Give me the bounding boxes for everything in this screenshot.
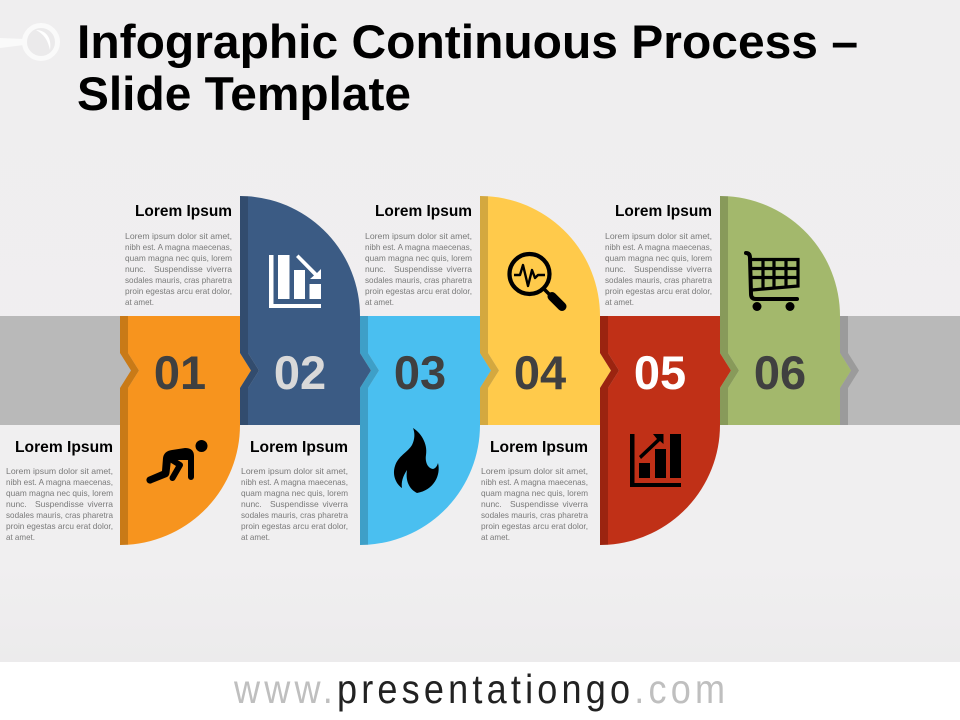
step 03 sky blue: 03	[394, 346, 446, 399]
text block: step 01: viverra	[88, 499, 113, 509]
icon: rising bar chart	[630, 434, 681, 487]
text block: step 04: Suspendisse	[394, 264, 443, 274]
text block: step 02: nibh est. A magna maecenas,	[125, 242, 232, 252]
text block: step 05: at amet.	[481, 532, 510, 542]
step 01 orange: 01	[154, 346, 206, 399]
step 02 navy	[240, 196, 371, 425]
text block: step 06: nunc.	[605, 264, 626, 274]
step 05 red: 05	[634, 346, 686, 399]
text block: step 02: Suspendisse	[154, 264, 203, 274]
text block: step 05: proin egestas arcu erat dolor,	[481, 521, 588, 531]
text block: step 02: quam magna nec quis, lorem	[125, 253, 232, 263]
text block: step 06: Lorem Ipsum	[615, 203, 712, 220]
text block: step 02: viverra	[206, 264, 232, 274]
text block: step 03: nunc.	[241, 499, 262, 509]
text block: step 03: nibh est. A magna maecenas,	[241, 477, 348, 487]
text block: step 01: nunc.	[6, 499, 27, 509]
text block: step 02: Lorem ipsum dolor sit amet,	[125, 231, 232, 241]
text block: step 05	[481, 439, 588, 542]
text block: step 06: Suspendisse	[634, 264, 683, 274]
text block: step 01: Suspendisse	[35, 499, 84, 509]
text block: step 04: proin egestas arcu erat dolor,	[365, 286, 472, 296]
title: Slide Template	[77, 67, 411, 120]
text block: step 03: proin egestas arcu erat dolor,	[241, 521, 348, 531]
text block: step 04: quam magna nec quis, lorem	[365, 253, 472, 263]
text block: step 02: sodales mauris, cras pharetra	[125, 275, 232, 285]
text block: step 05: sodales mauris, cras pharetra	[481, 510, 588, 520]
text block: step 05: nibh est. A magna maecenas,	[481, 477, 588, 487]
step 02 navy: 02	[274, 346, 326, 399]
text block: step 03: Lorem ipsum dolor sit amet,	[241, 466, 348, 476]
icon: magnifier with pulse	[510, 254, 562, 306]
footer website text: www.presentationgo.com	[233, 667, 725, 713]
text block: step 06: viverra	[686, 264, 712, 274]
footer bar	[0, 662, 960, 720]
text block: step 04: viverra	[446, 264, 472, 274]
step 04 yellow	[480, 196, 611, 425]
icon: falling bar chart	[269, 254, 321, 308]
text block: step 02: nunc.	[125, 264, 146, 274]
text block: step 04: nibh est. A magna maecenas,	[365, 242, 472, 252]
text block: step 04	[365, 203, 472, 307]
text block: step 01: sodales mauris, cras pharetra	[6, 510, 113, 520]
text block: step 03	[241, 439, 348, 542]
step 06 green	[720, 196, 851, 425]
icon: shopping cart	[746, 253, 798, 311]
text block: step 06: sodales mauris, cras pharetra	[605, 275, 712, 285]
icon: runner at start	[146, 440, 208, 484]
text block: step 04: at amet.	[365, 297, 394, 307]
text block: step 03: Lorem Ipsum	[250, 439, 348, 456]
title: Infographic Continuous Process –	[77, 15, 858, 68]
text block: step 01: nibh est. A magna maecenas,	[6, 477, 113, 487]
text block: step 01: Lorem ipsum dolor sit amet,	[6, 466, 113, 476]
text block: step 01: quam magna nec quis, lorem	[6, 488, 113, 498]
step 05 red	[600, 316, 731, 545]
text block: step 01: Lorem Ipsum	[15, 439, 113, 456]
text block: step 06	[605, 203, 712, 307]
text block: step 03: viverra	[322, 499, 348, 509]
grey process band	[0, 316, 960, 425]
text block: step 05: viverra	[562, 499, 588, 509]
text block: step 04: sodales mauris, cras pharetra	[365, 275, 472, 285]
text block: step 02: proin egestas arcu erat dolor,	[125, 286, 232, 296]
text block: step 03: quam magna nec quis, lorem	[241, 488, 348, 498]
text block: step 03: at amet.	[241, 532, 270, 542]
text block: step 01: at amet.	[6, 532, 35, 542]
text block: step 02	[125, 203, 232, 307]
text block: step 06: quam magna nec quis, lorem	[605, 253, 712, 263]
text block: step 01	[6, 439, 113, 542]
icon: flame	[394, 428, 439, 493]
text block: step 06: at amet.	[605, 297, 634, 307]
text block: step 05: nunc.	[481, 499, 502, 509]
text block: step 04: nunc.	[365, 264, 386, 274]
text block: step 06: Lorem ipsum dolor sit amet,	[605, 231, 712, 241]
text block: step 03: Suspendisse	[270, 499, 319, 509]
text block: step 06: proin egestas arcu erat dolor,	[605, 286, 712, 296]
text block: step 02: at amet.	[125, 297, 154, 307]
step 06 green: 06	[754, 346, 806, 399]
text block: step 01: proin egestas arcu erat dolor,	[6, 521, 113, 531]
text block: step 04: Lorem Ipsum	[375, 203, 472, 220]
step 03 sky blue	[360, 316, 491, 545]
step 04 yellow: 04	[514, 346, 566, 399]
text block: step 04: Lorem ipsum dolor sit amet,	[365, 231, 472, 241]
title	[77, 15, 858, 120]
text block: step 03: sodales mauris, cras pharetra	[241, 510, 348, 520]
step 01 orange	[120, 316, 251, 545]
text block: step 05: quam magna nec quis, lorem	[481, 488, 588, 498]
text block: step 05: Suspendisse	[510, 499, 559, 509]
text block: step 02: Lorem Ipsum	[135, 203, 232, 220]
text block: step 05: Lorem ipsum dolor sit amet,	[481, 466, 588, 476]
pin logo	[0, 26, 58, 58]
text block: step 05: Lorem Ipsum	[490, 439, 588, 456]
text block: step 06: nibh est. A magna maecenas,	[605, 242, 712, 252]
